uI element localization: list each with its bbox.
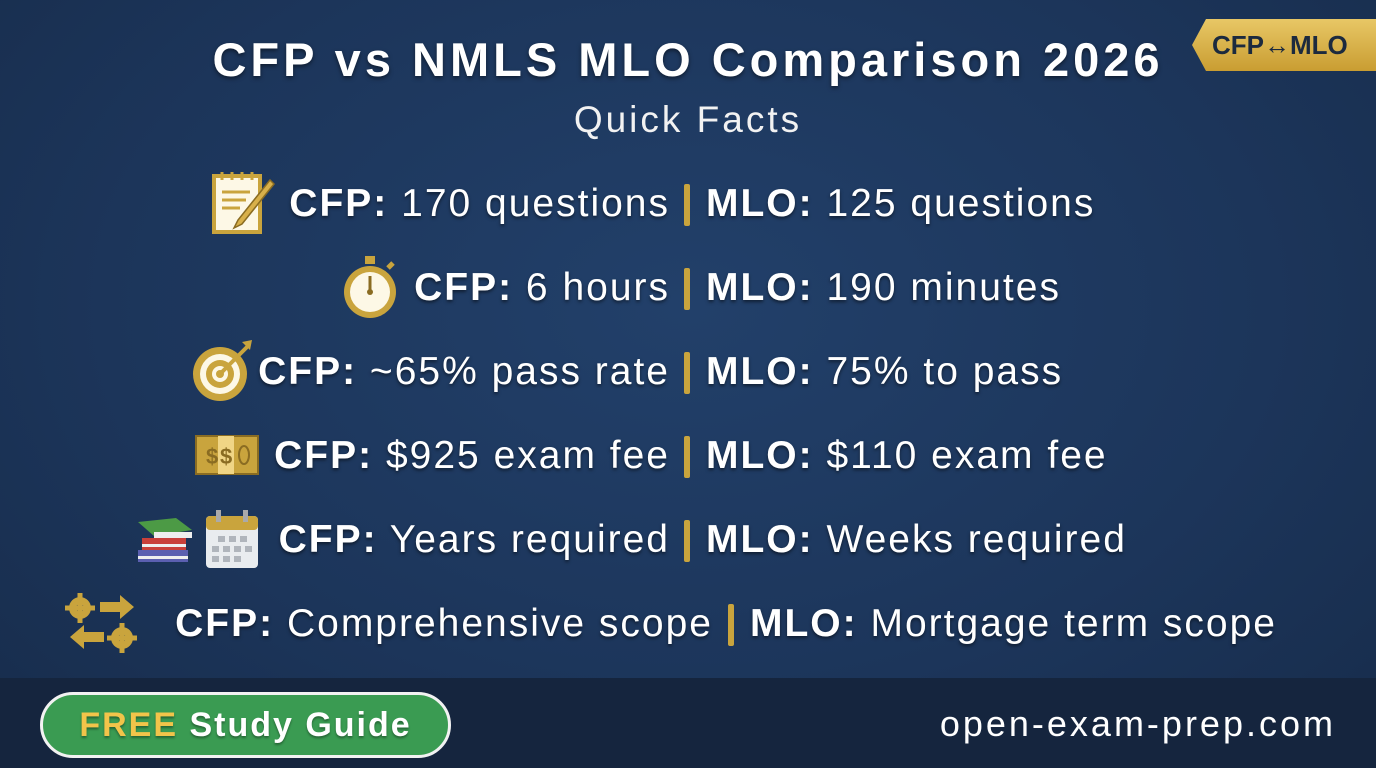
text: MLO scope: MLO: Mortgage term scope — [750, 602, 1277, 645]
icon: money: $ — [220, 444, 232, 469]
footer band — [0, 678, 1376, 768]
url: open-exam-prep.com — [940, 703, 1336, 744]
text: CFP fee: CFP: $925 exam fee — [274, 434, 670, 477]
row: fee — [195, 434, 1108, 478]
text: MLO pass: MLO: 75% to pass — [706, 350, 1063, 393]
text: CFP hours: CFP: 6 hours — [414, 266, 670, 309]
button: free study guide — [40, 692, 451, 758]
icon: money — [195, 435, 259, 475]
title: CFP vs NMLS MLO Comparison 2026 — [212, 33, 1164, 86]
icon: books — [138, 518, 192, 562]
button: free study guide: FREE Study Guide — [79, 706, 412, 744]
text: MLO minutes: MLO: 190 minutes — [706, 266, 1061, 309]
row: prep time — [138, 510, 1127, 568]
subtitle: Quick Facts — [574, 99, 802, 140]
text: CFP questions: CFP: 170 questions — [289, 182, 670, 225]
icon: gears arrows — [65, 593, 137, 653]
badge: CFP-MLO: CFP↔MLO — [1212, 30, 1348, 60]
text: CFP years: CFP: Years required — [279, 518, 670, 561]
text: MLO weeks: MLO: Weeks required — [706, 518, 1127, 561]
text: CFP scope: CFP: Comprehensive scope — [175, 602, 713, 645]
text: CFP pass rate: CFP: ~65% pass rate — [258, 350, 670, 393]
row: time — [344, 256, 1061, 318]
icon: notepad — [212, 172, 275, 234]
icon: calendar — [206, 510, 258, 568]
text: MLO fee: MLO: $110 exam fee — [706, 434, 1108, 477]
row: pass rate — [193, 340, 1063, 401]
icon: stopwatch — [344, 256, 396, 318]
icon: money: $ — [206, 444, 218, 469]
badge: CFP-MLO — [1192, 19, 1376, 71]
text: MLO questions: MLO: 125 questions — [706, 182, 1095, 225]
icon: target — [193, 340, 252, 401]
row: scope — [65, 593, 1277, 653]
row: questions — [212, 172, 1095, 234]
